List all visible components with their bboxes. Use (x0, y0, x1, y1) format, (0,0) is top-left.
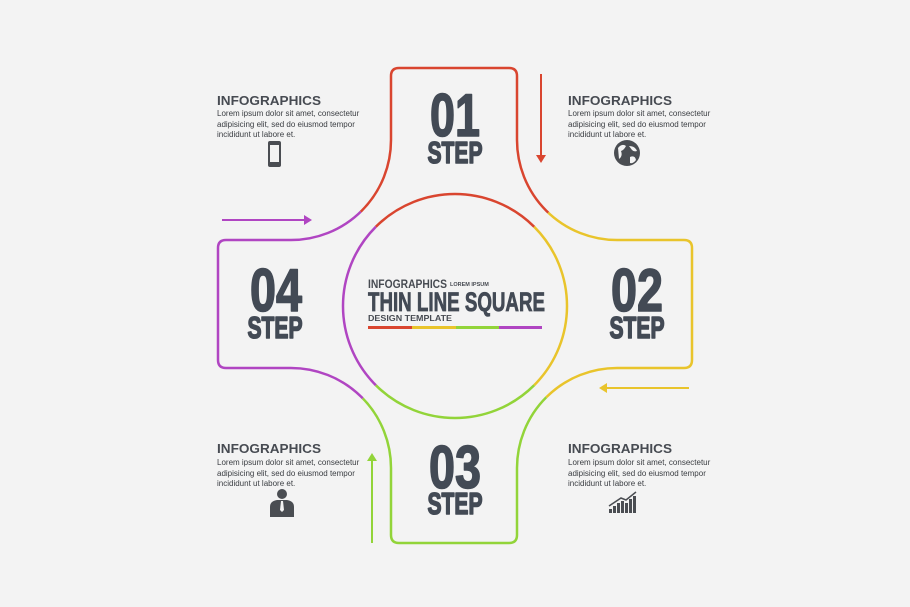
step 02: 02 (611, 257, 663, 324)
text block bottom-right: Lorem ipsum dolor sit amet, consectetur (568, 458, 711, 467)
text block top-left: INFOGRAPHICS (217, 94, 321, 108)
center title: LOREM IPSUM (450, 282, 489, 288)
step 03: 03 (429, 434, 481, 501)
text block top-right: Lorem ipsum dolor sit amet, consectetur (568, 109, 711, 118)
cross outline shape (218, 68, 692, 543)
arrow: red down (536, 74, 546, 163)
text block top-right: incididunt ut labore et. (568, 130, 646, 139)
text block top-left (217, 94, 360, 139)
center title: THIN LINE SQUARE (368, 287, 545, 317)
step 04: STEP (248, 310, 302, 345)
center title: INFOGRAPHICS (368, 277, 447, 291)
icon: globe (614, 140, 640, 166)
text block top-left: adipisicing elit, sed do eiusmod tempor (217, 120, 355, 129)
arrow: yellow left (599, 383, 689, 393)
text block top-right (568, 94, 711, 139)
step 01: 01 (430, 82, 480, 149)
step 04: 04 (250, 257, 302, 324)
text block top-right: INFOGRAPHICS (568, 94, 672, 108)
text block top-right: adipisicing elit, sed do eiusmod tempor (568, 120, 706, 129)
step 03 (428, 434, 482, 521)
text block bottom-right: adipisicing elit, sed do eiusmod tempor (568, 469, 706, 478)
text block bottom-left: incididunt ut labore et. (217, 479, 295, 488)
center title (368, 277, 545, 329)
text block bottom-right: incididunt ut labore et. (568, 479, 646, 488)
step 03: STEP (428, 486, 482, 521)
arrow: green up (367, 453, 377, 543)
text block top-left: Lorem ipsum dolor sit amet, consectetur (217, 109, 360, 118)
text block bottom-left: Lorem ipsum dolor sit amet, consectetur (217, 458, 360, 467)
text block bottom-left (217, 442, 360, 488)
icon: bar chart (609, 492, 636, 513)
text block bottom-left: adipisicing elit, sed do eiusmod tempor (217, 469, 355, 478)
text block bottom-right: INFOGRAPHICS (568, 442, 672, 456)
step 02 (610, 257, 664, 345)
center title: DESIGN TEMPLATE (368, 313, 452, 323)
icon: phone (268, 141, 281, 167)
text block top-left: incididunt ut labore et. (217, 130, 295, 139)
arrow: purple right (222, 215, 312, 225)
step 02: STEP (610, 310, 664, 345)
step 04 (248, 257, 302, 345)
text block bottom-left: INFOGRAPHICS (217, 442, 321, 456)
step 01 (428, 82, 482, 170)
text block bottom-right (568, 442, 711, 488)
icon: person (270, 489, 294, 517)
step 01: STEP (428, 135, 482, 170)
